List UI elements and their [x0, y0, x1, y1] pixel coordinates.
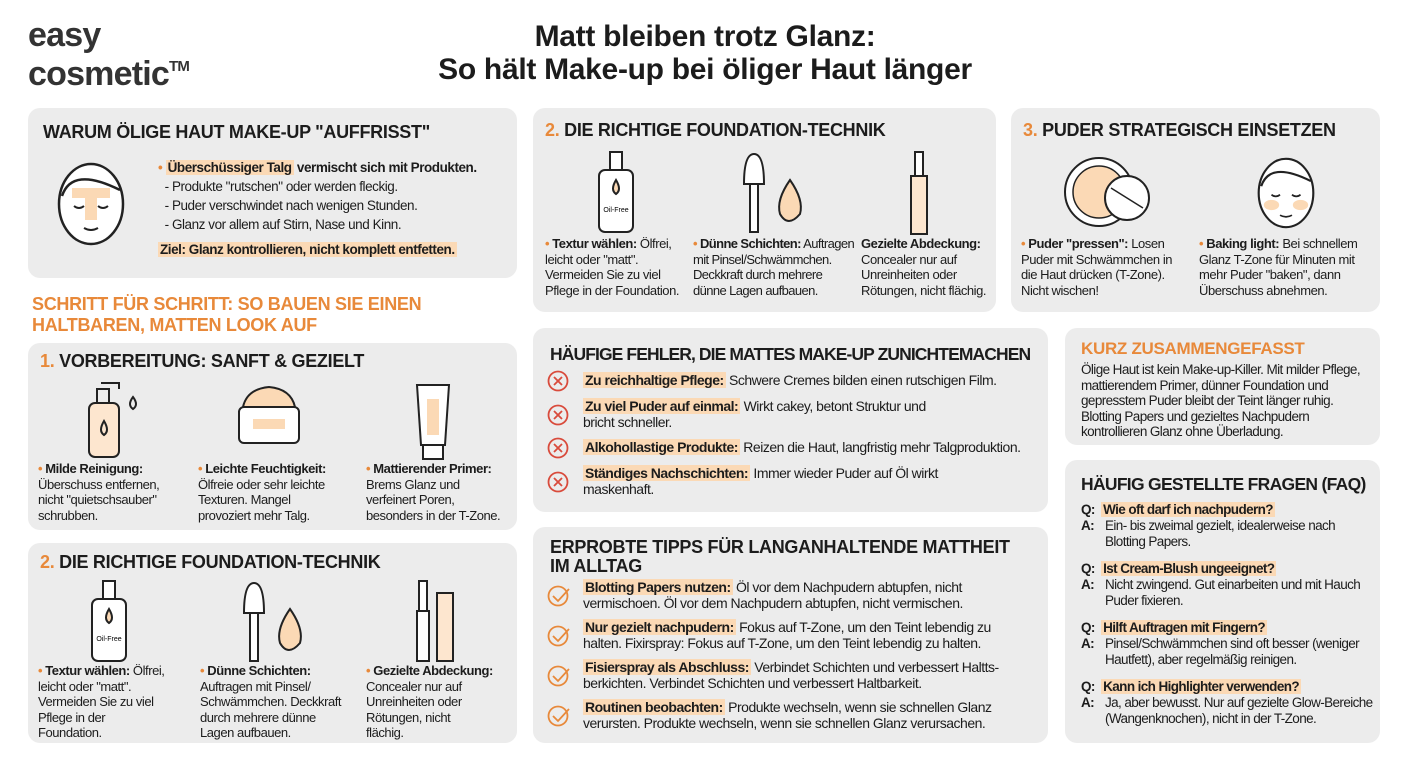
panel: puder: mehr Puder "baken", dann — [1199, 267, 1341, 282]
list: fehler — [548, 370, 1020, 497]
heading: schritt für schritt: SCHRITT FÜR SCHRITT: SO BAUEN SIE EINEN — [32, 294, 421, 314]
panel: puder: • Baking light: Bei schnellem — [1199, 236, 1357, 251]
list: tipps: Nur gezielt nachpudern: Fokus auf T-Zone, um den Teint lebendig zu — [585, 619, 991, 635]
list: fehler: Ständiges Nachschichten: Immer wieder Puder auf Öl wirkt — [585, 465, 938, 481]
panel: tipps: IM ALLTAG — [550, 556, 642, 576]
panel: foundation left: 2. DIE RICHTIGE FOUNDATION-TECHNIK — [40, 552, 380, 572]
panel: kurz zusammengefasst: gepresstem Puder bleibt der Teint länger ruhig. — [1081, 393, 1333, 408]
panel: vorbereitung: nicht "quietschsauber" — [38, 492, 157, 507]
panel: faq: HÄUFIG GESTELLTE FRAGEN (FAQ) — [1081, 474, 1366, 494]
list: tipps: berkichten. Verbindet Schichten und verbessert Haltbarkeit. — [583, 675, 922, 691]
faq list: Q: Kann ich Highlighter verwenden? — [1081, 679, 1299, 694]
panel: fehler: HÄUFIGE FEHLER, DIE MATTES MAKE-UP ZUNICHTEMACHEN — [550, 344, 1030, 364]
panel: fehler — [533, 328, 1048, 512]
panel: warum — [28, 108, 517, 278]
faq list: A: — [1081, 518, 1094, 533]
panel: tipps: ERPROBTE TIPPS FÜR LANGANHALTENDE MATTHEIT — [550, 537, 1010, 557]
list: fehler: bricht schneller. — [583, 414, 672, 430]
panel: faq — [1065, 460, 1380, 743]
panel: foundation left: Unreinheiten oder — [366, 694, 462, 709]
panel: tipps — [533, 527, 1048, 743]
icon: primer tube — [416, 384, 450, 460]
panel: vorbereitung: • Mattierender Primer: — [366, 461, 491, 476]
faq list: Q: Ist Cream-Blush ungeeignet? — [1081, 561, 1274, 576]
panel: warum: - Glanz vor allem auf Stirn, Nase und Kinn. — [165, 217, 401, 232]
panel: puder: Nicht wischen! — [1021, 282, 1099, 298]
icon: bottle — [598, 151, 634, 233]
panel: vorbereitung: provoziert mehr Talg. — [198, 508, 310, 522]
list: tipps: halten. Fixirspray: Fokus auf T-Zone, um den Teint lebendig zu halten. — [583, 635, 981, 651]
panel: puder: Überschuss abnehmen. — [1199, 282, 1327, 298]
panel: puder: Glanz T-Zone für Minuten mit — [1199, 252, 1355, 266]
list: tipps: Routinen beobachten: Produkte wechseln, wenn sie schnellen Glanz — [585, 699, 992, 715]
panel: vorbereitung: Ölfreie oder sehr leichte — [198, 476, 325, 492]
panel: foundation top: Gezielte Abdeckung: — [861, 236, 981, 251]
panel: vorbereitung: Überschuss entfernen, — [38, 476, 159, 492]
faq list: Ja, aber bewusst. Nur auf gezielte Glow-Bereiche — [1105, 695, 1373, 710]
panel: warum: Ziel: Glanz kontrollieren, nicht komplett entfetten. — [160, 242, 455, 257]
panel: warum: - Produkte "rutschen" oder werden fleckig. — [165, 179, 398, 194]
faq list: Hautfett), aber regelmäßig reinigen. — [1105, 652, 1297, 667]
panel: vorbereitung: schrubben. — [38, 508, 98, 522]
panel: foundation top: • Dünne Schichten: Auftragen — [693, 236, 854, 251]
icon: powder compact — [1064, 157, 1150, 227]
panel: foundation top: mit Pinsel/Schwämmchen. — [693, 252, 832, 266]
list: tipps — [548, 579, 999, 731]
panel: foundation left: Foundation. — [38, 725, 102, 740]
panel: foundation top: Pflege in der Foundation. — [545, 282, 679, 298]
panel: puder: die Haut drücken (T-Zone). — [1021, 267, 1165, 282]
faq list: (Wangenknochen), nicht in der T-Zone. — [1105, 711, 1316, 726]
panel: warum: • Überschüssiger Talg vermischt sich mit Produkten. — [158, 160, 477, 175]
panel: foundation left: Vermeiden Sie zu viel — [38, 694, 154, 709]
title — [438, 20, 972, 86]
panel: foundation left: Concealer nur auf — [366, 678, 462, 694]
panel: foundation top: • Textur wählen: Ölfrei, — [545, 236, 671, 251]
panel: foundation left: Lagen aufbauen. — [200, 725, 291, 740]
list: fehler: Alkohollastige Produkte: Reizen die Haut, langfristig mehr Talgproduktion. — [585, 439, 1020, 455]
panel: foundation left — [28, 543, 517, 743]
panel: vorbereitung — [28, 343, 517, 530]
faq list: Blotting Papers. — [1105, 534, 1191, 549]
faq list: A: — [1081, 577, 1094, 592]
list: tipps: verursten. Produkte wechseln, wenn sie schnellen Glanz verursachen. — [583, 715, 985, 731]
panel: puder — [1011, 108, 1380, 312]
panel: foundation top: dünne Lagen aufbauen. — [693, 282, 818, 298]
panel: vorbereitung: Brems Glanz und — [366, 476, 460, 492]
list: tipps: vermischoen. Öl vor dem Nachpudern abtupfen, nicht vermischen. — [583, 595, 963, 611]
logo: easy — [28, 16, 100, 54]
panel: warum: WARUM ÖLIGE HAUT MAKE-UP "AUFFRISST" — [43, 122, 430, 142]
panel: foundation top: Concealer nur auf — [861, 252, 957, 266]
list: tipps: Blotting Papers nutzen: Öl vor dem Nachpudern abtupfen, nicht — [585, 579, 962, 595]
panel: foundation left: durch mehrere dünne — [200, 710, 316, 724]
panel: puder: Puder mit Schwämmchen in — [1021, 252, 1172, 266]
icon: cream jar — [238, 386, 300, 444]
panel: puder: 3. PUDER STRATEGISCH EINSETZEN — [1023, 120, 1336, 140]
panel: kurz zusammengefasst: Blotting Papers und gezieltes Nachpudern — [1081, 408, 1309, 424]
list: fehler: maskenhaft. — [583, 481, 654, 497]
list: tipps: Fisierspray als Abschluss: Verbindet Schichten und verbessert Haltts- — [585, 659, 999, 675]
faq list: Ein- bis zweimal gezielt, idealerweise nach — [1105, 518, 1335, 533]
title: So hält Make-up bei öliger Haut länger — [438, 53, 972, 86]
panel: vorbereitung: besonders in der T-Zone. — [366, 508, 500, 522]
panel: vorbereitung: verfeinert Poren, — [366, 492, 454, 507]
icon: oil-free bottle: Oil-Free — [96, 636, 122, 643]
panel: foundation left: • Gezielte Abdeckung: — [366, 663, 493, 678]
icon: face — [1258, 158, 1314, 228]
faq list: A: — [1081, 695, 1094, 710]
title: Matt bleiben trotz Glanz: — [535, 20, 875, 53]
panel: kurz zusammengefasst — [1065, 328, 1380, 445]
panel: kurz zusammengefasst: Ölige Haut ist kein Make-up-Killer. Mit milder Pflege, — [1081, 362, 1360, 377]
panel: foundation top: 2. DIE RICHTIGE FOUNDATION-TECHNIK — [545, 120, 885, 140]
panel: kurz zusammengefasst: KURZ ZUSAMMENGEFASST — [1081, 339, 1305, 358]
list: fehler: Zu reichhaltige Pflege: Schwere Cremes bilden einen rutschigen Film. — [585, 372, 996, 388]
icon: face — [58, 162, 124, 246]
panel: kurz zusammengefasst: kontrollieren Glanz ohne Überladung. — [1081, 424, 1283, 439]
icon: cleanser bottle — [88, 382, 137, 458]
faq list: A: — [1081, 636, 1094, 651]
panel: vorbereitung: 1. VORBEREITUNG: SANFT & GEZIELT — [40, 351, 364, 371]
panel: puder: • Puder "pressen": Losen — [1021, 236, 1164, 251]
icon: concealer — [416, 580, 454, 662]
icon: concealer — [910, 151, 928, 235]
panel: kurz zusammengefasst: mattierendem Primer, dünner Foundation und — [1081, 378, 1328, 392]
faq list — [1081, 502, 1373, 726]
faq list: Nicht zwingend. Gut einarbeiten und mit Hauch — [1105, 577, 1360, 592]
panel: foundation left: • Dünne Schichten: — [200, 663, 311, 678]
faq list: Q: Wie oft darf ich nachpudern? — [1081, 502, 1273, 517]
faq list: Q: Hilft Auftragen mit Fingern? — [1081, 620, 1265, 635]
panel: foundation top — [533, 108, 996, 312]
panel: foundation left: Schwämmchen. Deckkraft — [200, 694, 341, 709]
heading: schritt für schritt: HALTBAREN, MATTEN LOOK AUF — [32, 315, 317, 335]
panel: warum: - Puder verschwindet nach wenigen Stunden. — [165, 198, 417, 213]
heading: schritt für schritt — [32, 294, 421, 335]
logo — [28, 16, 189, 93]
panel: foundation top: Rötungen, nicht flächig. — [861, 282, 986, 298]
logo: cosmeticTM — [28, 55, 189, 93]
icon: brush — [743, 153, 802, 233]
panel: vorbereitung: • Leichte Feuchtigkeit: — [198, 461, 326, 476]
panel: foundation top: Vermeiden Sie zu viel — [545, 267, 661, 282]
panel: foundation left: Auftragen mit Pinsel/ — [200, 678, 310, 694]
panel: foundation left: leicht oder "matt". — [38, 678, 131, 694]
faq list: Puder fixieren. — [1105, 593, 1183, 608]
list: fehler: Zu viel Puder auf einmal: Wirkt cakey, betont Struktur und — [585, 398, 926, 414]
icon: oil-free bottle — [91, 580, 127, 662]
panel: foundation left: • Textur wählen: Ölfrei, — [38, 663, 164, 678]
panel: vorbereitung: • Milde Reinigung: — [38, 461, 143, 476]
panel: foundation left: Rötungen, nicht — [366, 710, 450, 724]
faq list: Pinsel/Schwämmchen sind oft besser (weniger — [1105, 636, 1359, 651]
icon: bottle: Oil-Free — [603, 207, 629, 214]
panel: foundation top: Unreinheiten oder — [861, 267, 957, 282]
panel: vorbereitung: Texturen. Mangel — [198, 492, 291, 507]
panel: foundation left: flächig. — [366, 725, 404, 740]
panel: foundation left: Pflege in der — [38, 710, 105, 724]
icon: brush sponge — [243, 582, 302, 662]
panel: foundation top: leicht oder "matt". — [545, 252, 638, 266]
panel: foundation top: Deckkraft durch mehrere — [693, 267, 822, 282]
